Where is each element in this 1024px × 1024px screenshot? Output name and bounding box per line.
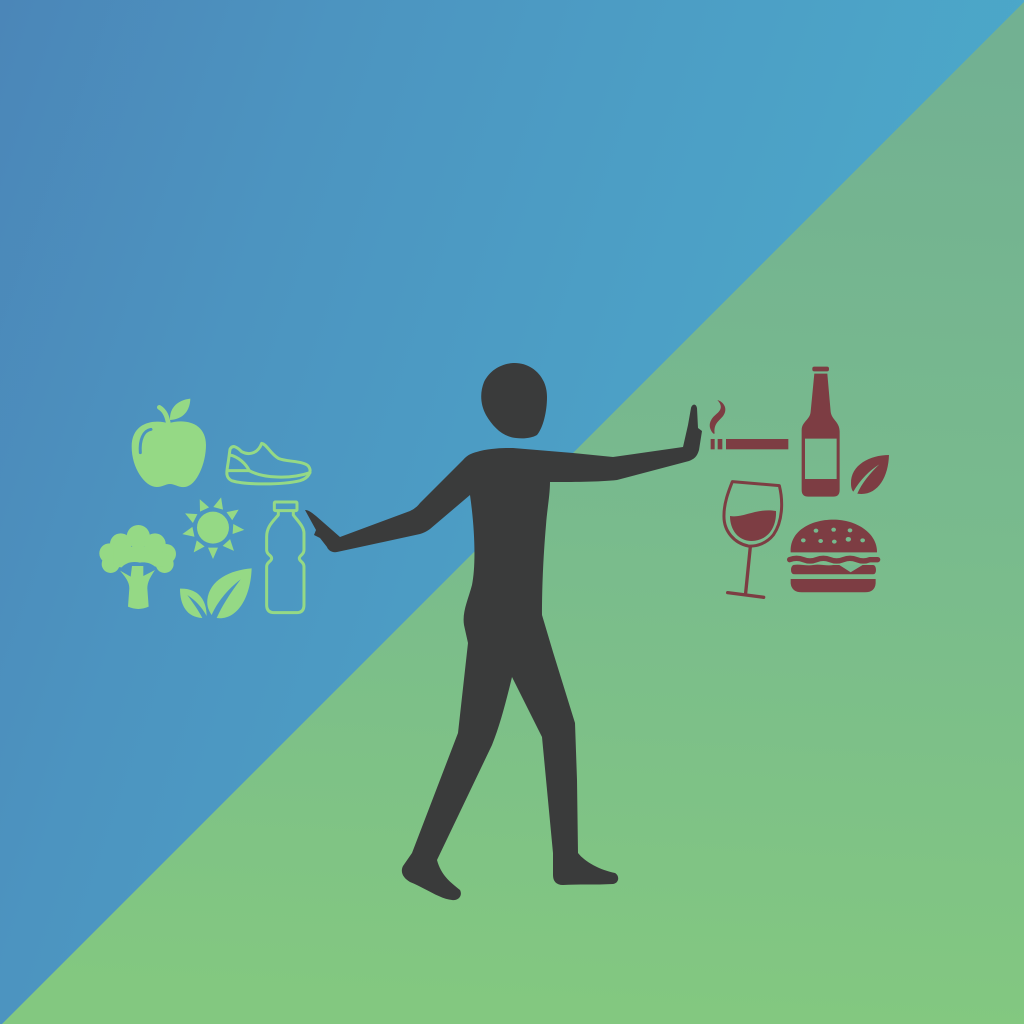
icon: apple [132,399,206,487]
icon: single leaf [851,455,889,494]
icon: two leaves [180,568,252,618]
icon: beer bottle [802,367,840,497]
figure body, arms and legs [305,405,702,900]
icon group: healthy choices [99,399,310,618]
icon: sun [181,496,245,559]
icon: water bottle [267,502,304,613]
icon: running shoe [227,443,310,484]
icon group: unhealthy choices [710,367,889,597]
figure head [481,363,547,438]
figure: dark silhouette pushing both arms outward [305,363,702,900]
icon: hamburger [790,520,878,592]
icon: wine glass [724,482,782,597]
icon: broccoli [99,525,176,609]
icon: cigarette with smoke [710,400,788,449]
